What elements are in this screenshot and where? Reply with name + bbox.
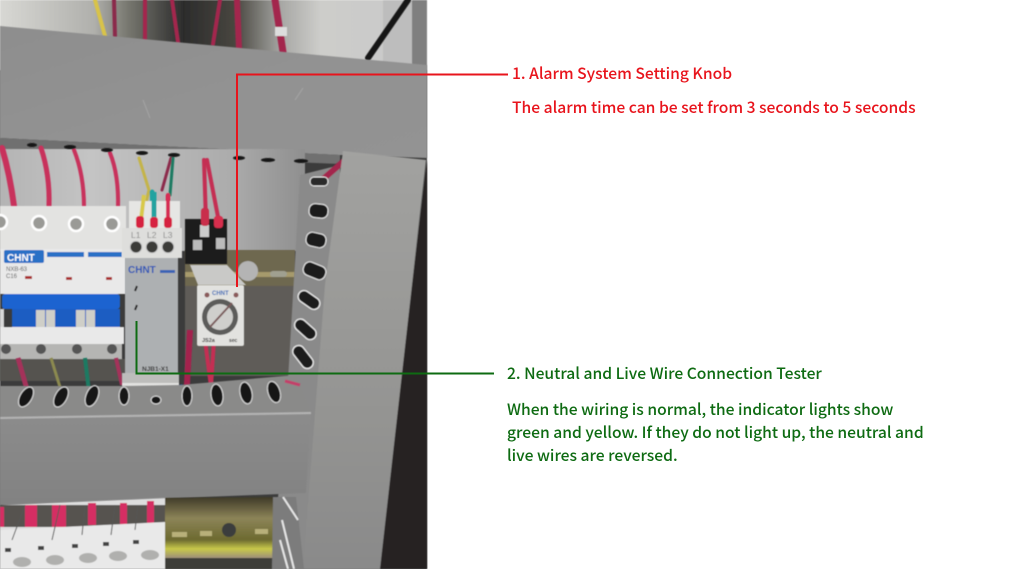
timer model label: JS2a: [202, 338, 216, 344]
text: wiring indicator description: [507, 397, 924, 466]
top wires: [95, 0, 408, 58]
leader line: wire tester (green): [136, 321, 494, 374]
miniature circuit breakers: C16: [6, 274, 18, 280]
top wire duct: [0, 26, 427, 164]
text: wiring indicator description: When the wiring is normal, the indicator lights show: [507, 397, 893, 420]
tester wiring below breakers: [18, 330, 214, 402]
tester model label: NJB1-X1: [142, 366, 169, 373]
module: neutral and live wire tester: [122, 192, 182, 398]
text: alarm time description: The alarm time can be set from 3 seconds to 5 seconds: [512, 95, 916, 118]
black relay socket: [185, 208, 246, 285]
wiring above modules: [2, 148, 219, 222]
right vertical wire duct with slots: [272, 151, 427, 569]
DIN rail behind modules: [185, 250, 295, 376]
tester brand label: CHNT: [128, 265, 156, 276]
CHNT label: CHNT: [7, 253, 35, 264]
steel back panel: [0, 149, 305, 251]
terminal labels: L3: [163, 230, 173, 240]
photo background and top steel: [0, 0, 427, 569]
terminal labels: L1: [131, 230, 141, 240]
timer brand label: CHNT: [212, 291, 229, 297]
heading: neutral and live wire connection tester: 2. Neutral and Live Wire Connection Tester: [507, 361, 822, 384]
breaker model label: NXB-63: [6, 267, 28, 273]
timer relay: sec: [229, 338, 238, 344]
lower wire duct with slots: [0, 375, 311, 505]
lower breaker row and rail: [0, 497, 304, 569]
top duct slots: [27, 143, 308, 163]
terminal labels: L2: [147, 230, 157, 240]
timer relay: [197, 285, 244, 346]
terminal labels: [131, 230, 173, 240]
miniature circuit breakers: [0, 206, 126, 381]
text: wiring indicator description: green and yellow. If they do not light up, the neutral and: [507, 420, 924, 443]
leader line: alarm knob (red): [237, 74, 508, 287]
heading: alarm system setting knob: 1. Alarm System Setting Knob: [512, 61, 732, 84]
text: wiring indicator description: live wires are reversed.: [507, 443, 678, 466]
